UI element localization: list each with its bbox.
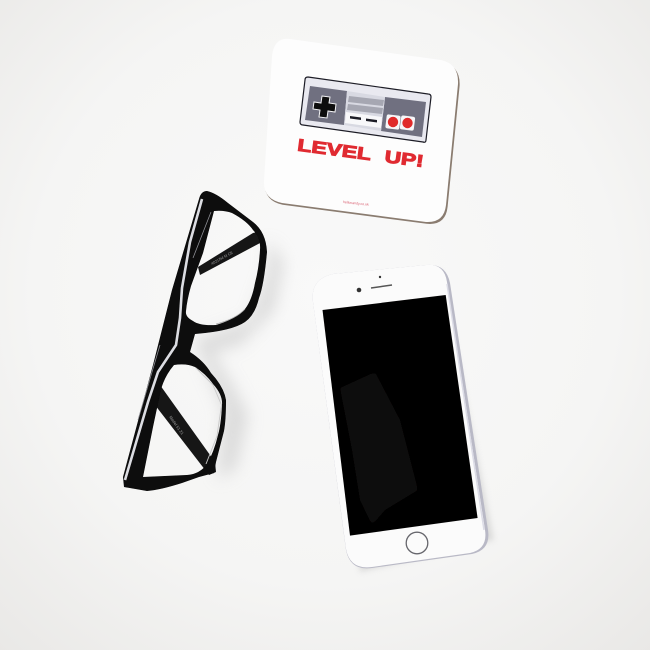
- NES controller: [300, 77, 431, 142]
- glasses arm: lower: Model 51 21: [168, 415, 185, 436]
- phone side band: [447, 284, 484, 530]
- d-pad: [313, 96, 336, 118]
- controller left panel: [305, 86, 347, 125]
- frame thin stripe: [138, 212, 211, 420]
- coaster edge: [265, 40, 460, 224]
- phone shadow: [345, 270, 494, 572]
- select and start buttons: [345, 112, 382, 128]
- frame inner grey edge: top lens: [216, 309, 245, 324]
- coaster small url: hellocandy.co.uk: [343, 200, 369, 207]
- speaker: [371, 285, 392, 288]
- phone: [313, 265, 494, 572]
- phone edge: [313, 265, 488, 568]
- glasses shadow: [195, 240, 284, 480]
- glasses arm: upper: [198, 232, 262, 275]
- sensor: [379, 276, 381, 278]
- phone screen: [322, 295, 478, 536]
- phone face: [313, 265, 485, 567]
- coaster top: [264, 39, 458, 222]
- glasses: [123, 191, 267, 491]
- glasses arm: upper: 4021/54 M CE: [211, 250, 234, 266]
- A and B buttons: [385, 114, 415, 131]
- home button: [406, 532, 428, 554]
- level up text: UP!: [384, 147, 425, 171]
- coaster: [264, 39, 460, 224]
- camera: [357, 288, 361, 292]
- arm tip bottom: [208, 466, 216, 474]
- level up text: LEVEL: [296, 136, 372, 164]
- frame inner white edge: bottom lens: [196, 368, 222, 464]
- level up text: [296, 136, 425, 171]
- controller grey bars: [347, 96, 384, 114]
- glasses arm: lower: [155, 385, 216, 475]
- screen reflection: [340, 372, 418, 525]
- frame main stripe: [125, 199, 202, 480]
- glasses frame: [123, 191, 267, 491]
- controller right panel: [381, 97, 426, 137]
- controller centre panel: [344, 91, 385, 131]
